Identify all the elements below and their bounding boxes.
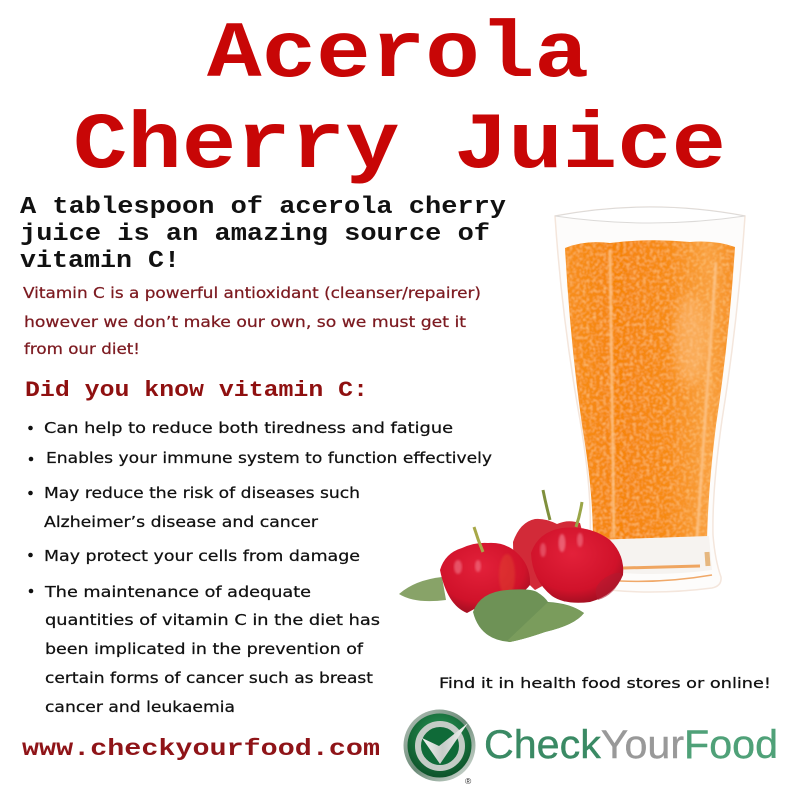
stem right cherry (576, 502, 582, 527)
bullet list (28, 419, 492, 716)
website url: www.checkyourfood.com (22, 736, 380, 762)
intro text: Vitamin C is a powerful antioxidant (cleanser/repairer) (23, 284, 481, 302)
stem back cherry (543, 490, 550, 520)
bullet list: been implicated in the prevention of (45, 640, 364, 658)
bullet list: May reduce the risk of diseases such (44, 484, 360, 502)
acerola cherries and leaves (399, 490, 623, 642)
title: Acerola (207, 10, 589, 101)
bullet list: Enables your immune system to function effectively (46, 449, 492, 467)
left cherry (440, 543, 530, 613)
bullet list: cancer and leukaemia (45, 698, 235, 716)
intro text: however we don’t make our own, so we must get it (24, 313, 466, 331)
section heading: Did you know vitamin C: (25, 378, 368, 403)
subheading: juice is an amazing source of (20, 221, 490, 248)
left leaf (399, 577, 446, 601)
intro text (23, 284, 481, 358)
front right cherry (531, 528, 623, 603)
back cherry (513, 519, 590, 590)
bullet list: certain forms of cancer such as breast (45, 669, 373, 687)
bullet list: quantities of vitamin C in the diet has (45, 611, 380, 629)
intro text: from our diet! (24, 340, 140, 358)
stem left cherry (474, 527, 483, 552)
title: Cherry Juice (73, 101, 726, 192)
bullet list: May protect your cells from damage (44, 547, 360, 565)
glass of juice (555, 207, 745, 592)
bullet list: Alzheimer’s disease and cancer (44, 513, 319, 531)
logo (404, 710, 778, 786)
title (73, 10, 726, 192)
subheading (20, 194, 506, 275)
bullet list: Can help to reduce both tiredness and fatigue (44, 419, 453, 437)
subheading: vitamin C! (20, 248, 180, 275)
logo wordmark: CheckYourFood (484, 723, 778, 767)
subheading: A tablespoon of acerola cherry (20, 194, 506, 221)
bullet list: The maintenance of adequate (44, 583, 311, 601)
registered mark: ® (465, 776, 472, 786)
logo emblem (404, 710, 476, 782)
store note: Find it in health food stores or online! (439, 676, 771, 692)
front leaf (473, 589, 584, 642)
